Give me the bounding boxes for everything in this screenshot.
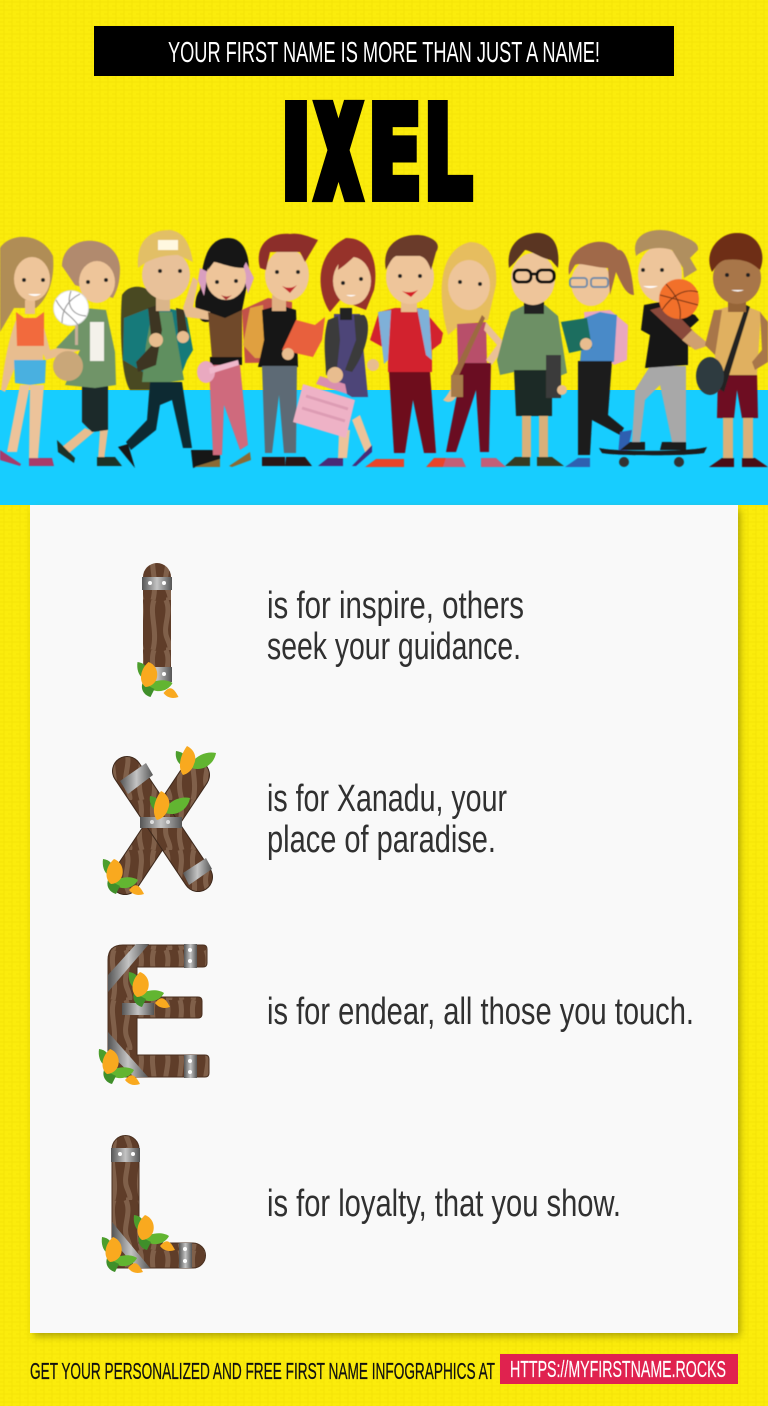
person 10: girl with tablet and ponytail — [561, 242, 634, 467]
text: letter L: is for loyalty, that you show. — [267, 1183, 621, 1225]
letter icon: wooden X — [103, 746, 216, 895]
panel: letter meanings card — [30, 505, 740, 1336]
person 3: hiker with cap and backpack — [118, 230, 220, 468]
text: letter X — [267, 778, 507, 861]
person 12: boy in tank top with shoulder bag — [696, 233, 768, 467]
person 2: girl with green jacket — [53, 241, 122, 466]
text: letter I: is for inspire, others — [267, 585, 524, 627]
text: letter I — [267, 585, 524, 668]
person 7: boy in red shirt — [365, 235, 454, 467]
text: letter X: is for Xanadu, your — [267, 778, 507, 820]
title: IXEL: X — [319, 90, 358, 219]
title: IXEL: I — [278, 78, 314, 231]
person 6: girl with pink bag — [293, 238, 375, 466]
illustration: group of twelve young people — [0, 230, 768, 468]
headline banner — [94, 26, 674, 76]
blue floor band — [0, 390, 768, 505]
letter icon: wooden I — [137, 563, 178, 698]
title: IXEL — [278, 78, 473, 231]
person 4: girl with headphones — [183, 238, 254, 467]
title: IXEL: E — [367, 80, 422, 229]
text: letter X: place of paradise. — [267, 819, 496, 861]
icon: basketball — [659, 279, 699, 319]
person 9: boy with glasses and laptop — [497, 233, 567, 466]
icon: skateboard — [599, 447, 707, 467]
title: IXEL: L — [423, 79, 473, 228]
person 8: blond girl — [442, 242, 506, 467]
letter icon: wooden L — [102, 1136, 205, 1273]
person 5: boy with book — [242, 234, 325, 466]
icon: volleyball — [54, 290, 88, 326]
text: letter I: seek your guidance. — [267, 626, 521, 668]
person 1: girl with volleyball — [0, 237, 81, 466]
icon: pink handbag — [293, 367, 355, 438]
letter icon: wooden E — [99, 944, 209, 1085]
person 11: skateboarder with basketball — [599, 230, 710, 467]
